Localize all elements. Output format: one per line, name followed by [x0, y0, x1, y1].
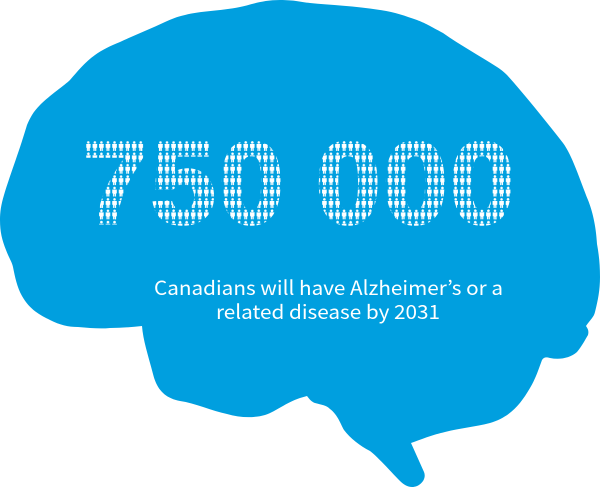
- caption: [154, 272, 503, 325]
- big number filled with people pattern: 750 000: [83, 118, 515, 248]
- caption line 2: related disease by 2031: [216, 296, 440, 325]
- caption line 1: Canadians will have Alzheimer’s or a: [154, 272, 503, 301]
